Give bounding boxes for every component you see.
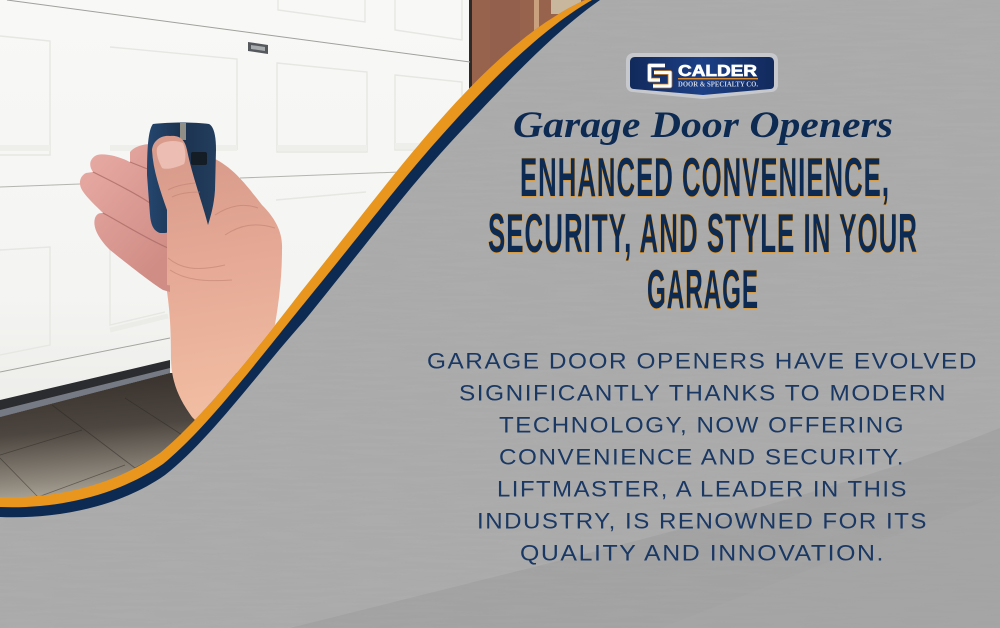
logo badge <box>626 53 778 99</box>
thumbnail <box>157 141 185 169</box>
door panels <box>0 0 462 355</box>
body paragraph: CONVENIENCE AND SECURITY. <box>499 444 905 470</box>
body paragraph: QUALITY AND INNOVATION. <box>520 540 885 566</box>
curved orange band <box>0 0 592 507</box>
skin creases <box>168 183 275 281</box>
body paragraph: TECHNOLOGY, NOW OFFERING <box>499 412 905 438</box>
body paragraph: INDUSTRY, IS RENOWNED FOR ITS <box>477 508 928 534</box>
door handle <box>248 42 268 54</box>
palm and wrist <box>166 158 282 425</box>
floor <box>0 373 236 498</box>
hand <box>80 122 282 425</box>
fingers <box>80 144 170 292</box>
headline <box>488 146 918 320</box>
body paragraph: GARAGE DOOR OPENERS HAVE EVOLVED <box>427 348 978 374</box>
photo: garage door and hand holding remote <box>0 0 600 510</box>
body paragraph: SIGNIFICANTLY THANKS TO MODERN <box>459 380 947 406</box>
thumb <box>152 136 208 286</box>
logo name: CALDER <box>678 63 758 80</box>
logo tagline: DOOR & SPECIALTY CO. <box>678 80 758 88</box>
door bottom seal <box>0 360 170 417</box>
garage door <box>0 0 472 420</box>
remote control <box>147 122 216 233</box>
body paragraph: LIFTMASTER, A LEADER IN THIS <box>497 476 908 502</box>
headline: GARAGE <box>647 258 759 320</box>
subtitle: Garage Door Openers <box>513 105 893 146</box>
body paragraph <box>427 348 978 566</box>
curved navy band <box>0 0 600 517</box>
brick wall <box>471 0 585 86</box>
logo mark <box>650 66 670 86</box>
